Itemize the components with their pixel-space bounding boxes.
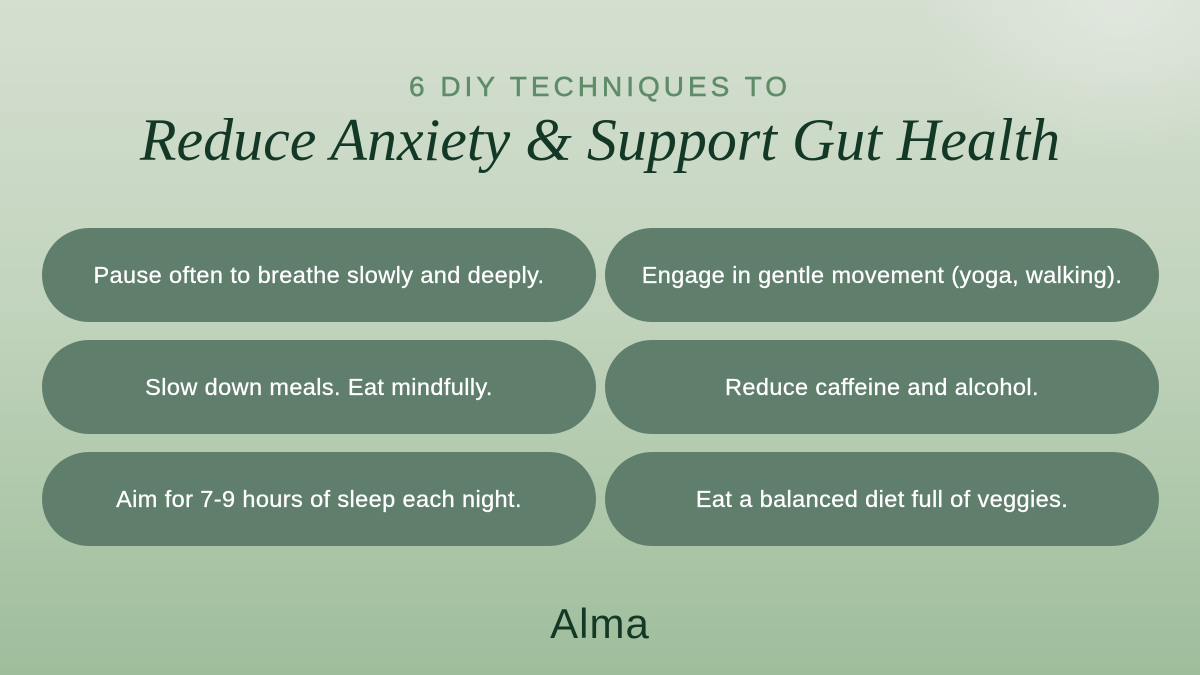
logo: Alma: [550, 600, 650, 647]
pill: meals: [42, 340, 596, 434]
title: Reduce Anxiety & Support Gut Health: [140, 107, 1060, 173]
pill: caffeine: [605, 340, 1159, 434]
pill: movement: [605, 228, 1159, 322]
pill: sleep: [42, 452, 596, 546]
pill: diet: Eat a balanced diet full of veggies.: [696, 486, 1068, 512]
pill: movement: Engage in gentle movement (yoga, walking).: [642, 262, 1122, 288]
pill: meals: Slow down meals. Eat mindfully.: [145, 374, 493, 400]
pill: caffeine: Reduce caffeine and alcohol.: [725, 374, 1039, 400]
pill: breathe: Pause often to breathe slowly and deeply.: [93, 262, 544, 288]
pill: diet: [605, 452, 1159, 546]
subtitle: 6 DIY TECHNIQUES TO: [409, 71, 791, 102]
pill: breathe: [42, 228, 596, 322]
pill: sleep: Aim for 7-9 hours of sleep each night.: [116, 486, 522, 512]
